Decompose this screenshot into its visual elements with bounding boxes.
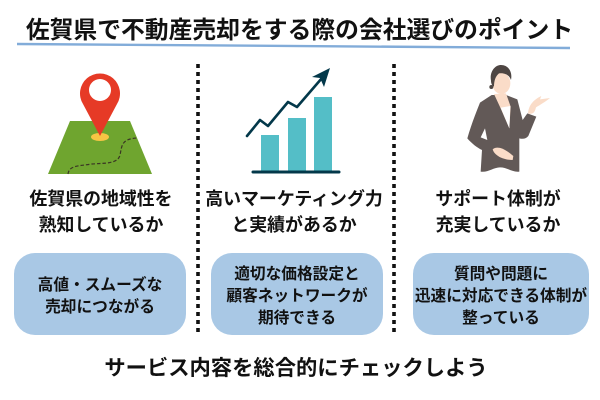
callout: right benefit [413,253,589,335]
heading: local knowledge [29,189,173,235]
callout: left benefit [14,253,186,335]
heading: marketing: 高いマーケティング力 [205,189,383,209]
heading: marketing: と実績があるか [231,215,357,235]
callout: middle benefit [211,253,383,335]
heading: support: 充実しているか [436,215,560,235]
footer message: サービス内容を総合的にチェックしよう [104,356,488,380]
callout: left benefit: 売却につながる [45,298,155,316]
callout: middle benefit: 顧客ネットワークが [226,288,368,304]
heading: local knowledge: 佐賀県の地域性を [29,189,173,209]
title: 佐賀県で不動産売却をする際の会社選びのポイント [26,17,573,44]
heading: local knowledge: 熟知しているか [39,215,163,235]
callout: left benefit: 高値・スムーズな [38,276,162,294]
heading: marketing [205,189,383,235]
callout: right benefit: 質問や問題に [454,266,548,282]
heading: support: サポート体制が [435,189,561,209]
callout: middle benefit: 期待できる [258,310,336,326]
callout: right benefit: 迅速に対応できる体制が [415,288,587,304]
callout: middle benefit: 適切な価格設定と [234,266,360,282]
heading: support [435,189,561,235]
callout: right benefit: 整っている [462,310,540,326]
